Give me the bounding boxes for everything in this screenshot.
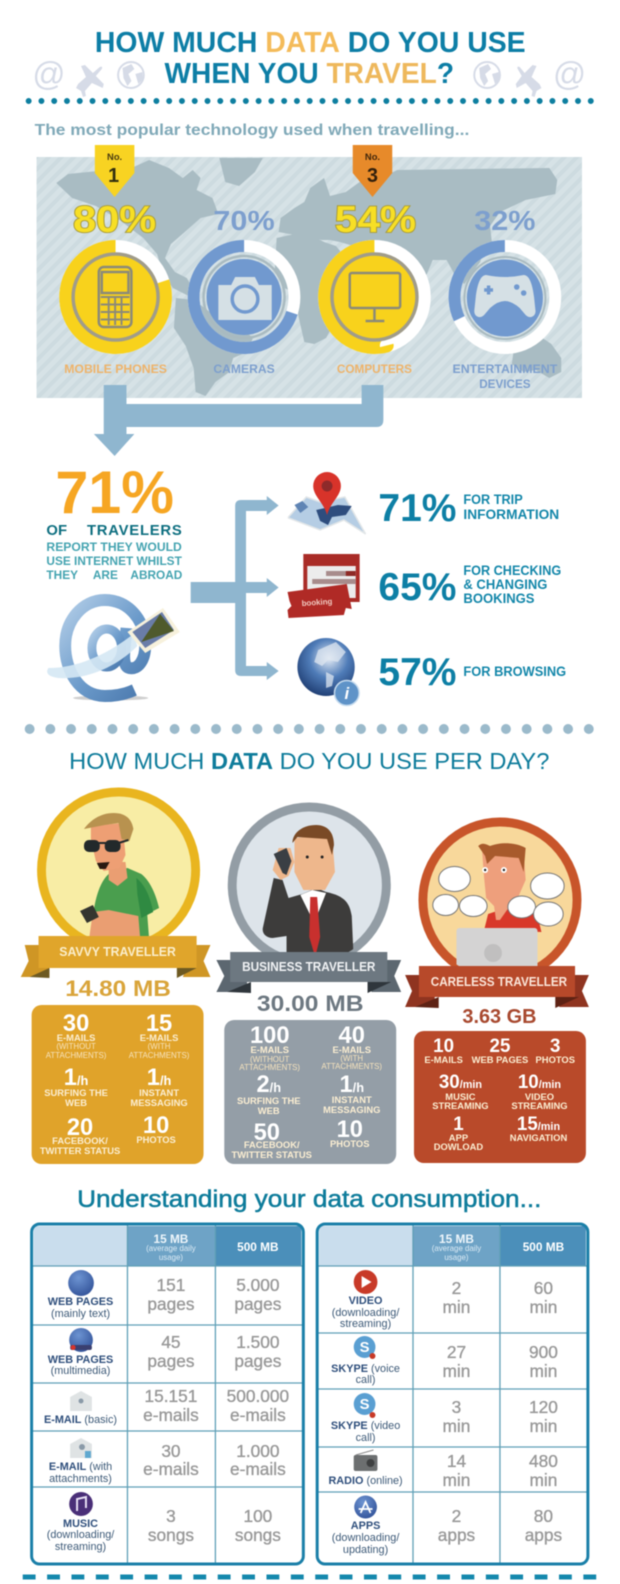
icon row: right decorations: @ — [553, 55, 586, 92]
table: left data allowance: 3 — [166, 1506, 176, 1526]
panel: business traveller — [216, 807, 401, 1164]
stat: 71% of travelers: TRAVELERS — [87, 523, 182, 539]
card: savvy traveller usage: SURFING THE — [44, 1088, 108, 1099]
table: left data allowance: 500.000 — [227, 1386, 289, 1406]
card: careless traveller usage: APP — [449, 1133, 468, 1144]
stat: 71% of travelers: ARE — [93, 568, 118, 582]
stat: 71% for trip information: INFORMATION — [463, 507, 559, 522]
icon: skype voice: S — [360, 1340, 370, 1356]
card: careless traveller usage: 3 — [550, 1036, 561, 1057]
table: right data allowance: updating) — [343, 1544, 388, 1556]
table: right data allowance: 480 — [529, 1451, 558, 1471]
divider dots — [29, 98, 591, 104]
stat: computers 54%: COMPUTERS — [337, 364, 412, 376]
table: left data allowance: (downloading/ — [47, 1529, 115, 1541]
table: right data allowance: min — [443, 1361, 470, 1381]
card: business traveller usage: FACEBOOK/ — [244, 1140, 300, 1151]
card: business traveller usage: SURFING THE — [237, 1096, 301, 1107]
table: left data allowance: songs — [148, 1525, 194, 1545]
card: savvy traveller usage: 15 — [146, 1010, 172, 1037]
card: careless traveller usage: WEB PAGES — [472, 1055, 528, 1066]
icon: apps — [354, 1496, 377, 1518]
table: right data allowance: APPS — [351, 1520, 380, 1532]
card: business traveller usage: PHOTOS — [330, 1139, 369, 1150]
ribbon: savvy traveller — [21, 936, 210, 978]
stat: cameras 70%: 70% — [213, 205, 275, 236]
data total: savvy traveller: 14.80 MB — [65, 976, 171, 1001]
ribbon: careless traveller: CARELESS TRAVELLER — [431, 975, 567, 989]
table: right data allowance: apps — [525, 1525, 562, 1545]
title: HOW MUCH DATA DO YOU USE — [95, 27, 526, 59]
icon: computer monitor — [350, 273, 400, 321]
stat: 65% for checking and changing bookings: & CHANGING — [463, 577, 547, 592]
table: right data allowance: 14 — [447, 1451, 466, 1471]
table: right data allowance: (downloading/ — [332, 1307, 400, 1319]
card: savvy traveller usage: 30 — [63, 1010, 89, 1037]
card: savvy traveller usage: INSTANT — [139, 1088, 179, 1099]
card: business traveller usage: ATTACHMENTS) — [321, 1062, 382, 1071]
table: left data allowance: pages — [234, 1351, 282, 1371]
icon: video play — [354, 1270, 377, 1294]
card: careless traveller usage: PHOTOS — [536, 1055, 575, 1066]
stat: 71% for trip information — [378, 487, 559, 530]
table: right data allowance: 500 MB — [523, 1240, 565, 1254]
badge: No. 1 — [95, 145, 134, 197]
table: left data allowance: 500 MB — [237, 1240, 279, 1254]
card: business traveller usage: 100 — [250, 1022, 290, 1049]
card: savvy traveller usage: 1/h — [64, 1064, 88, 1091]
card: savvy traveller usage: PHOTOS — [136, 1135, 176, 1146]
table: right data allowance: 2 — [452, 1506, 461, 1526]
ribbon: business traveller — [216, 952, 401, 993]
stat: 71% of travelers: THEY — [46, 568, 78, 582]
panel: savvy traveller — [21, 792, 210, 1164]
card: careless traveller usage: STREAMING — [511, 1101, 568, 1112]
table: left data allowance: e-mails — [143, 1459, 199, 1479]
table: right data allowance: 3 — [452, 1397, 461, 1417]
stat: 65% for checking and changing bookings: 65% — [378, 566, 456, 609]
portrait: business traveller — [232, 807, 386, 963]
table: right data allowance: min — [530, 1361, 557, 1381]
portrait: savvy traveller — [41, 792, 196, 948]
table: right data allowance: call) — [356, 1432, 376, 1444]
table: left data allowance: 45 — [161, 1332, 181, 1352]
stat: entertainment devices 32% — [438, 205, 572, 391]
table: right data allowance: 80 — [534, 1506, 553, 1526]
arrow: branching connector — [191, 496, 279, 680]
card: savvy traveller usage: ATTACHMENTS) — [129, 1051, 190, 1060]
card: savvy traveller usage: E-MAILS — [140, 1033, 178, 1044]
card: business traveller usage: 2/h — [256, 1071, 281, 1098]
card: careless traveller usage: E-MAILS — [424, 1055, 463, 1066]
card: careless traveller usage: NAVIGATION — [510, 1133, 567, 1144]
stat: 71% of travelers: ABROAD — [130, 568, 183, 582]
table: right data allowance: min — [530, 1416, 557, 1436]
table: left data allowance: pages — [147, 1294, 195, 1314]
table: right data allowance: SKYPE (video — [331, 1420, 400, 1432]
card: business traveller usage: 40 — [339, 1022, 365, 1049]
table: right data allowance: SKYPE (voice — [331, 1363, 400, 1375]
table: left data allowance: MUSIC — [63, 1518, 98, 1530]
ribbon: savvy traveller: SAVVY TRAVELLER — [59, 945, 176, 959]
icon: map pin — [289, 472, 366, 534]
card: savvy traveller usage: 1/h — [147, 1064, 171, 1091]
stat: 65% for checking and changing bookings: BOOKINGS — [463, 591, 535, 606]
card: careless traveller usage: 15/min — [517, 1114, 560, 1135]
data total: business traveller: 30.00 MB — [257, 991, 364, 1016]
table: right data allowance: 27 — [447, 1342, 466, 1362]
icon: mobile phone — [99, 267, 131, 327]
stat: cameras 70% — [181, 205, 308, 376]
stat: 65% for checking and changing bookings — [378, 563, 561, 609]
table: left data allowance: 5.000 — [236, 1275, 279, 1295]
table: right data allowance: VIDEO — [349, 1295, 383, 1307]
badge: No. 3 — [353, 145, 392, 197]
table: left data allowance: E-MAIL (with — [49, 1461, 112, 1473]
icon row: left decorations — [32, 55, 144, 97]
data total: careless traveller: 3.63 GB — [462, 1006, 537, 1028]
table: left data allowance: songs — [235, 1525, 281, 1545]
stat: 71% of travelers: 71% — [55, 459, 174, 526]
stat: computers 54%: 54% — [335, 199, 416, 240]
icon row: left decorations: @ — [32, 55, 65, 92]
table: left data allowance: 100 — [243, 1506, 272, 1526]
table: left data allowance: E-MAIL (basic) — [44, 1414, 117, 1426]
icon: globe with info badge: i — [344, 684, 349, 703]
icon row: right decorations — [474, 55, 586, 97]
icon: radio — [354, 1450, 377, 1471]
table: left data allowance: attachments) — [49, 1473, 112, 1485]
stat: 71% of travelers: REPORT THEY WOULD — [46, 540, 182, 554]
table: left data allowance: usage) — [159, 1253, 183, 1262]
stat: 57% for browsing — [378, 651, 566, 694]
card: business traveller usage: INSTANT — [332, 1095, 372, 1106]
stat: 71% of travelers — [46, 459, 183, 582]
ribbon: careless traveller — [405, 966, 589, 1008]
stat: mobile phones 80%: 80% — [73, 199, 156, 240]
table: right data allowance: (average daily — [432, 1244, 481, 1253]
stat: mobile phones 80%: MOBILE PHONES — [64, 364, 167, 376]
table: left data allowance: e-mails — [230, 1459, 286, 1479]
table: left data allowance: 1.000 — [236, 1441, 279, 1461]
panel: careless traveller — [405, 822, 589, 1163]
table: left data allowance: e-mails — [230, 1405, 286, 1425]
card: business traveller usage: E-MAILS — [250, 1045, 289, 1056]
badge: No. 1: 1 — [108, 165, 119, 187]
card: savvy traveller usage: 10 — [143, 1112, 169, 1139]
card: business traveller usage: (WITHOUT — [250, 1055, 290, 1064]
subtitle: The most popular technology used when travelling... — [35, 122, 469, 139]
divider dashes — [23, 1574, 601, 1580]
divider dots — [30, 724, 590, 734]
card: business traveller usage: TWITTER STATUS — [232, 1150, 312, 1161]
table: left data allowance: (multimedia) — [51, 1365, 110, 1377]
table: left data allowance: 15.151 — [145, 1386, 197, 1406]
table: right data allowance — [317, 1224, 588, 1564]
card: savvy traveller usage: (WITHOUT — [56, 1042, 96, 1051]
icon: skype video: S — [360, 1397, 370, 1413]
card: careless traveller usage: 10/min — [518, 1072, 561, 1093]
card: savvy traveller usage: WEB — [65, 1098, 87, 1109]
table: left data allowance — [32, 1224, 303, 1564]
table: right data allowance: RADIO (online) — [328, 1475, 403, 1487]
card: business traveller usage: ATTACHMENTS) — [239, 1063, 300, 1072]
icon: basic e-mail envelope — [70, 1391, 92, 1411]
card: savvy traveller usage: TWITTER STATUS — [40, 1146, 120, 1157]
table: right data allowance: min — [530, 1470, 557, 1490]
stat: computers 54% — [314, 199, 435, 376]
stat: entertainment devices 32%: ENTERTAINMENT — [453, 364, 557, 376]
icon: web pages multimedia globe — [69, 1328, 93, 1352]
icon: camera — [218, 277, 272, 320]
icon: at sign with photo — [47, 600, 180, 700]
icon: globe with info badge — [297, 638, 359, 706]
arrow: bracket from phones and computers — [94, 385, 383, 456]
table: left data allowance: 151 — [157, 1275, 185, 1295]
card: business traveller usage: WEB — [258, 1106, 280, 1117]
icon: booking calendar: booking — [301, 597, 333, 608]
icon: skype video — [354, 1393, 375, 1418]
card: business traveller usage — [224, 1020, 396, 1164]
badge: No. 3: 3 — [367, 165, 378, 187]
card: business traveller usage: (WITH — [340, 1054, 363, 1063]
stat: 71% of travelers: OF — [46, 523, 67, 539]
heading: understanding data consumption: Understanding your data consumption... — [77, 1186, 541, 1213]
ribbon: business traveller: BUSINESS TRAVELLER — [242, 960, 375, 974]
card: savvy traveller usage: FACEBOOK/ — [52, 1136, 108, 1147]
table: right data allowance: 2 — [452, 1278, 461, 1298]
stat: 57% for browsing: FOR BROWSING — [463, 664, 566, 679]
table: right data allowance: 15 MB — [439, 1232, 474, 1246]
title — [95, 27, 526, 90]
table: left data allowance: 1.500 — [236, 1332, 279, 1352]
table: left data allowance: 30 — [161, 1441, 181, 1461]
portrait: careless traveller — [423, 822, 577, 978]
card: savvy traveller usage: (WITH — [148, 1042, 171, 1051]
table: right data allowance: min — [443, 1470, 470, 1490]
card: careless traveller usage: 10 — [433, 1036, 454, 1057]
card: careless traveller usage: DOWLOAD — [434, 1142, 483, 1153]
table: left data allowance: streaming) — [55, 1541, 106, 1553]
stat: entertainment devices 32%: DEVICES — [479, 379, 531, 391]
card: careless traveller usage: 1 — [453, 1114, 464, 1135]
table: right data allowance: min — [443, 1297, 470, 1317]
icon: game controller — [474, 275, 536, 317]
heading: data per day: HOW MUCH DATA DO YOU USE PER DAY? — [69, 748, 549, 774]
card: careless traveller usage: 25 — [490, 1036, 510, 1057]
card: business traveller usage: 50 — [254, 1119, 280, 1146]
table: left data allowance: WEB PAGES — [48, 1296, 113, 1308]
table: right data allowance: 120 — [529, 1397, 558, 1417]
table: right data allowance: streaming) — [340, 1318, 391, 1330]
icon: music note — [69, 1492, 93, 1516]
table: right data allowance: apps — [438, 1525, 476, 1545]
icon: web pages text globe — [68, 1270, 94, 1296]
table: right data allowance: (downloading/ — [332, 1532, 400, 1544]
table: right data allowance: min — [443, 1416, 470, 1436]
card: careless traveller usage: VIDEO — [525, 1092, 554, 1103]
card: savvy traveller usage — [32, 1005, 204, 1164]
card: savvy traveller usage: MESSAGING — [130, 1098, 188, 1109]
card: business traveller usage: 10 — [337, 1116, 363, 1143]
table: left data allowance: (average daily — [146, 1244, 196, 1253]
icon: booking calendar — [288, 554, 360, 618]
badge: No. 1: No. — [107, 152, 122, 163]
table: left data allowance: WEB PAGES — [48, 1354, 113, 1366]
card: savvy traveller usage: ATTACHMENTS) — [46, 1051, 107, 1060]
icon: skype voice — [354, 1336, 375, 1359]
stat: mobile phones 80% — [53, 199, 178, 376]
card: careless traveller usage — [414, 1031, 586, 1163]
card: business traveller usage: E-MAILS — [332, 1045, 371, 1056]
table: right data allowance: min — [530, 1297, 557, 1317]
card: careless traveller usage: MUSIC — [445, 1092, 476, 1103]
stat: 71% for trip information: FOR TRIP — [463, 492, 523, 507]
card: savvy traveller usage: 20 — [67, 1114, 93, 1141]
table: left data allowance: e-mails — [143, 1405, 199, 1425]
card: business traveller usage: MESSAGING — [323, 1105, 380, 1116]
table: right data allowance: call) — [356, 1374, 376, 1386]
card: careless traveller usage: STREAMING — [432, 1101, 489, 1112]
card: careless traveller usage: 30/min — [439, 1072, 482, 1093]
stat: 65% for checking and changing bookings: FOR CHECKING — [463, 563, 561, 578]
card: business traveller usage: 1/h — [339, 1071, 364, 1098]
card: savvy traveller usage: E-MAILS — [57, 1033, 95, 1044]
badge: No. 3: No. — [365, 152, 380, 163]
table: right data allowance: 60 — [534, 1278, 553, 1298]
table: left data allowance: pages — [234, 1294, 282, 1314]
panel: world map — [37, 157, 582, 398]
stat: entertainment devices 32%: 32% — [474, 205, 536, 236]
table: right data allowance: 900 — [529, 1342, 558, 1362]
title: WHEN YOU TRAVEL? — [165, 58, 454, 90]
icon: e-mail with attachment — [70, 1438, 92, 1458]
stat: 71% of travelers: USE INTERNET WHILST — [46, 554, 183, 568]
table: left data allowance: 15 MB — [153, 1232, 189, 1246]
stat: cameras 70%: CAMERAS — [213, 364, 275, 376]
stat: 57% for browsing: 57% — [378, 651, 456, 694]
table: left data allowance: pages — [147, 1351, 195, 1371]
table: left data allowance: (mainly text) — [51, 1308, 110, 1320]
stat: 71% for trip information: 71% — [378, 487, 456, 530]
table: right data allowance: usage) — [444, 1253, 469, 1262]
